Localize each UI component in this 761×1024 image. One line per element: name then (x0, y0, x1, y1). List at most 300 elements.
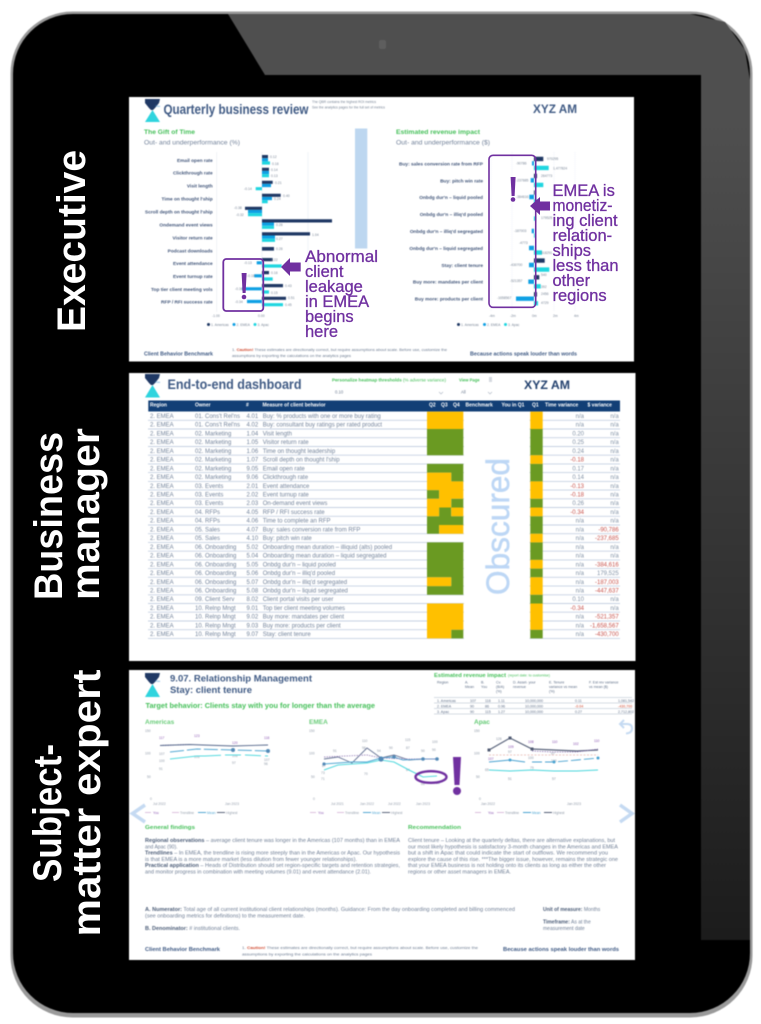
bar chart: out- and underperformance percent: -0.34 (235, 287, 243, 291)
bar chart: estimated revenue impact: Buy more: mandates per client (413, 280, 483, 286)
table: region, owner, number, measure: 4.10 (246, 536, 259, 542)
chart: Apac: 150 (474, 729, 480, 733)
table: time variance and dollar variance: -187,003 (595, 580, 619, 586)
chart: EMEA: 71 (321, 777, 325, 781)
callout: abnormal client leakage: Abnormal (305, 248, 378, 266)
table: time variance and dollar variance: n/a (610, 458, 619, 464)
table: estimated revenue impact: variance vs mean (549, 685, 577, 689)
table: time variance and dollar variance: n/a (576, 545, 585, 551)
chart: EMEA: You (318, 811, 324, 815)
table: estimated revenue impact: 10,000,000 (525, 710, 543, 714)
table: region, owner, number, measure: 2. EMEA (150, 510, 174, 516)
note: QBR contents: See the analytics pages for the full set of metrics (312, 106, 385, 110)
table: region, owner, number, measure: Buy: sales conversion rate from RFP (263, 527, 360, 533)
table header: Time variance (545, 402, 578, 408)
chart: Apac: 100 (474, 752, 480, 756)
chart: Apac: Jan 2022 (481, 802, 495, 806)
table: time variance and dollar variance: n/a (610, 423, 619, 429)
table: region, owner, number, measure: Buy: consultant buy ratings per rated product (263, 423, 382, 429)
table: estimated revenue impact: 107 (470, 699, 476, 703)
table: time variance and dollar variance: n/a (610, 449, 619, 455)
chart: Apac: 107 (488, 757, 494, 761)
table: region, owner, number, measure: Onbdg dur'n – liquid segregated (263, 588, 348, 594)
chart: Apac: 50 (476, 775, 480, 779)
metric definitions: B. Denominator: # institutional clients. (145, 926, 240, 932)
chart: Apac: 0 (479, 797, 481, 801)
bar chart: out- and underperformance percent: 0.16 (271, 271, 278, 275)
table: estimated revenue impact: Mean (465, 685, 474, 689)
table: region, owner, number, measure: Onbdg dur'n – illiq'd pooled (263, 571, 335, 577)
legend: percent chart: 2. EMEA (236, 323, 251, 327)
footer: caution note: assumptions by exporting the calculations on the analytics pages (242, 952, 372, 956)
icon: hourglass logo (145, 374, 160, 398)
table: estimated revenue impact: 10,000,000 (525, 699, 543, 703)
table: estimated revenue impact: You (481, 685, 487, 689)
table: region, owner, number, measure: Event attendance (263, 484, 310, 490)
table: estimated revenue impact: (%) (549, 690, 555, 694)
chart: Apac (474, 719, 600, 815)
chart: Apac: Trendline (505, 811, 519, 815)
table: estimated revenue impact: 116 (485, 699, 491, 703)
table: time variance and dollar variance: -0.13 (570, 484, 585, 490)
bar chart: out- and underperformance percent: Top tier client meeting vols (151, 287, 213, 293)
placeholder: pale blue column (355, 128, 367, 248)
bar chart: out- and underperformance percent: -0.32 (236, 213, 244, 217)
callout: abnormal client leakage: in EMEA (305, 293, 369, 311)
table: region, owner, number, measure: 5.04 (246, 554, 259, 560)
footer: tagline: Because actions speak louder than words (503, 947, 619, 953)
table: region, owner, number, measure: 2. EMEA (150, 519, 174, 525)
icon: previous arrow (132, 805, 145, 822)
table header: Owner (195, 402, 211, 408)
legend: revenue chart: 3. Apac (508, 323, 520, 327)
bar chart: out- and underperformance percent: 0.43 (285, 284, 292, 288)
table header: Benchmark (466, 402, 493, 408)
table: region, owner, number, measure: 03. Events (195, 492, 223, 498)
table: region, owner, number, measure: 9.01 (246, 606, 259, 612)
chart: Apac: 108 (528, 740, 534, 744)
table: estimated revenue impact: revenue (513, 685, 526, 689)
table: region, owner, number, measure: 5.02 (246, 545, 259, 551)
table: time variance and dollar variance: n/a (610, 414, 619, 420)
table: time variance and dollar variance: n/a (610, 501, 619, 507)
chart: Americas: 106 (232, 754, 238, 758)
chart: EMEA: EMEA (309, 719, 328, 726)
chart: Americas: 97 (232, 761, 236, 765)
chart: Apac: You (488, 811, 494, 815)
table: estimated revenue impact: (%) (496, 690, 502, 694)
table header: Measure of client behavior (262, 402, 326, 408)
table: time variance and dollar variance: n/a (610, 554, 619, 560)
table: region, owner, number, measure: 06. Onboarding (195, 562, 236, 568)
controls: heatmap thresholds and view page: Personalize heatmap thresholds (% adverse variance) (332, 378, 447, 382)
callout: abnormal client leakage: here (305, 323, 338, 341)
recommendation (408, 825, 619, 876)
bar chart: estimated revenue impact: Onbdg dur'n – liquid pooled (419, 195, 483, 201)
table: region, owner, number, measure: 06. Onboarding (195, 545, 236, 551)
table: region, owner, number, measure: 2. EMEA (150, 501, 174, 507)
chart: Apac: 100 (528, 756, 534, 760)
bar chart: out- and underperformance percent: -0.38 (234, 206, 242, 210)
brand: XYZ AM: XYZ AM (533, 102, 577, 116)
table: estimated revenue impact: 86 (485, 704, 489, 708)
recommendation: explore the cause of this rise. ***The bigger issue, however, remains the strategic one (408, 857, 618, 863)
table: region, owner, number, measure: 9.06 (246, 475, 259, 481)
recommendation: Client tenure – Looking at the quarterly deltas, there are alternative explanations, but (408, 838, 616, 844)
heading: the gift of time: The Gift of Time (144, 129, 195, 136)
chart: EMEA: 90 (421, 749, 425, 753)
table: time variance and dollar variance (570, 414, 619, 638)
note: QBR contents (312, 100, 385, 110)
bar chart: estimated revenue impact: 264773 (541, 174, 552, 178)
legend: percent chart: 3. Apac (258, 323, 269, 327)
chart: Apac: 109 (508, 745, 514, 749)
recommendation: regions or other asset managers in EMEA. (408, 870, 511, 876)
bar chart: estimated revenue impact: 518291 (541, 251, 552, 255)
table: region, owner, number, measure: 2. EMEA (150, 580, 174, 586)
bar chart: out- and underperformance percent: 1.04 (312, 233, 319, 237)
chart: Apac: 79 (530, 766, 534, 770)
chart: Americas: Highest (226, 811, 238, 815)
callout: EMEA monetizing less: other (552, 272, 591, 290)
table: time variance and dollar variance: -237,685 (595, 536, 619, 542)
chart: Americas: 100 (145, 752, 151, 756)
table: estimated revenue impact: 90 (470, 704, 474, 708)
table header: Q4 (453, 402, 460, 408)
table: time variance and dollar variance: -0.18 (570, 492, 585, 498)
chart: EMEA: 87 (406, 746, 410, 750)
chart: EMEA: 110 (362, 739, 368, 743)
table: time variance and dollar variance: -0.34 (570, 606, 585, 612)
footer: caution note: assumptions by exporting the calculations on the analytics pages (232, 354, 351, 358)
callout: abnormal client leakage: client (305, 263, 344, 281)
table: time variance and dollar variance: n/a (610, 510, 619, 516)
heading: relationship management: 9.07. Relationship Management (170, 674, 313, 684)
bar chart: out- and underperformance percent: 0.00 (258, 314, 265, 318)
general findings: and monitor progress in combination with meeting volumes (9.01) and event attendance (2.01). (145, 870, 371, 876)
chart: Americas: Mean (207, 811, 216, 815)
chart: EMEA: 115 (405, 738, 411, 742)
chart: Apac: Highest (553, 811, 565, 815)
recommendation: but a shift in Apac that could indicate the start of outflows. We recommend you (408, 851, 608, 857)
table: region, owner, number, measure: 5.05 (246, 562, 259, 568)
table: estimated revenue impact: Region (437, 680, 448, 684)
table: estimated revenue impact: 1. Americas (437, 699, 456, 703)
callout: EMEA monetizing less: monetiz- (552, 197, 612, 215)
chart: Americas: Americas (145, 719, 175, 726)
chart: Apac: Jan 2023 (567, 802, 581, 806)
table: region, owner, number, measure: 2. EMEA (150, 492, 174, 498)
bar chart: estimated revenue impact: 0m (532, 314, 537, 318)
side label: Subject-matter expert: matter expert (65, 670, 109, 936)
table row lines (148, 420, 620, 638)
table: time variance and dollar variance: n/a (576, 580, 585, 586)
bar chart: out- and underperformance percent: -0.13 (244, 261, 252, 265)
table: region, owner, number, measure: 2. EMEA (150, 466, 174, 472)
icon: return arrow (620, 720, 632, 734)
unit of measure and timeframe: Timeframe: As at the (543, 920, 591, 926)
chart: EMEA: 91 (333, 749, 337, 753)
footer: benchmark name: Client Behavior Benchmark (144, 352, 214, 358)
chart: EMEA: 90 (432, 748, 436, 752)
footer: tagline: Because actions speak louder than words (470, 352, 577, 358)
callout: EMEA monetizing less: relation- (552, 227, 612, 245)
table header (148, 400, 620, 412)
table: region, owner, number, measure: Onbdg dur'n – liquid pooled (263, 562, 336, 568)
bar chart: out- and underperformance percent: 0.24 (274, 197, 281, 201)
table: time variance and dollar variance: n/a (576, 562, 585, 568)
metric definitions: (see onboarding metrics for definitions) to the measurement date. (145, 914, 305, 920)
table: region, owner, number, measure: 03. Events (195, 501, 223, 507)
chart: Apac: 126 (496, 737, 502, 741)
table: region, owner, number, measure: Event turnup rate (263, 492, 309, 498)
table: region, owner, number, measure: Onbdg dur'n – illiq'd segregated (263, 580, 347, 586)
table: time variance and dollar variance: n/a (576, 588, 585, 594)
chart: EMEA: 94 (377, 749, 381, 753)
table: region, owner, number, measure: 4.05 (246, 510, 259, 516)
table: region, owner, number, measure: 06. Onboarding (195, 580, 236, 586)
table: region, owner, number, measure: 4.07 (246, 527, 259, 533)
bar chart: out- and underperformance percent: Event attendance (173, 261, 213, 267)
table: time variance and dollar variance: n/a (610, 466, 619, 472)
chart: Apac: 65 (485, 768, 489, 772)
chart: Apac: 102 (573, 742, 579, 746)
chart: Apac: Apac (474, 719, 490, 726)
table: region, owner, number, measure: 8.02 (246, 597, 259, 603)
controls: heatmap thresholds and view page: All (461, 390, 466, 394)
table: region, owner, number, measure: Visitor return rate (263, 440, 309, 446)
bar chart: estimated revenue impact: 2m (553, 314, 558, 318)
table: region, owner, number, measure: 5.06 (246, 571, 259, 577)
table: estimated revenue impact: Cv. (496, 680, 501, 684)
table: region, owner, number, measure: 2. EMEA (150, 588, 174, 594)
table: time variance and dollar variance: 0.20 (572, 431, 585, 437)
recommendation: Recommendation (408, 825, 462, 831)
bar chart: out- and underperformance percent: -1.00 (212, 314, 220, 318)
table: region, owner, number, measure: 06. Onboarding (195, 554, 236, 560)
table: region, owner, number, measure: Time to complete an RFP (263, 519, 331, 525)
bar chart: out- and underperformance percent: 0.26 (276, 247, 283, 251)
table: time variance and dollar variance: n/a (610, 597, 619, 603)
chart: EMEA: 50 (311, 775, 315, 779)
chart: EMEA: Trendline (345, 811, 359, 815)
table: region, owner, number, measure: 2. EMEA (150, 554, 174, 560)
table: region, owner, number, measure: Client portal visits per user (263, 597, 333, 603)
chart: EMEA: Jan 2023 (416, 802, 430, 806)
callout: EMEA monetizing less: ing client (552, 212, 618, 230)
table: estimated revenue impact: 1.27 (498, 710, 505, 714)
bar chart: out- and underperformance percent: Time on thought l'ship (162, 197, 213, 203)
table: time variance and dollar variance: -90,786 (598, 527, 619, 533)
general findings: is that EMEA is a more mature market (less dilution from fewer younger relationships). (145, 857, 357, 863)
bar chart: out- and underperformance percent: 0.40 (283, 194, 290, 198)
side label: Business manager: Business (27, 432, 71, 600)
table: estimated revenue impact: 10,000,000 (525, 704, 543, 708)
bar chart: estimated revenue impact: Onbdg dur'n – illiq'd segregated (410, 229, 483, 235)
bar chart: estimated revenue impact: 179525 (541, 216, 552, 220)
table: region, owner, number, measure: 2. EMEA (150, 536, 174, 542)
general findings: Practical application – Heads of Distribution should set region-specific targets and retention strategies, (145, 863, 400, 869)
general findings: and Apac (90). (145, 844, 178, 850)
heading: estimated revenue impact: Estimated revenue impact (396, 129, 481, 136)
chart: EMEA: 70 (364, 772, 368, 776)
table: region, owner, number, measure: 2. EMEA (150, 562, 174, 568)
metric definitions: A. Numerator: Total age of all current institutional client relationships (months). Guidance: From the day onboarding completed and billing commenced (145, 907, 515, 913)
side label: Executive: Executive (50, 150, 94, 332)
panel: end-to-end dashboard (129, 373, 636, 661)
table: region, owner, number, measure: 5.08 (246, 588, 259, 594)
table: region, owner, number, measure: Top tier client meeting volumes (263, 606, 345, 612)
subheading: dollar performance: Out- and underperformance ($) (396, 140, 490, 146)
note: QBR contents: The QBR contains the highest ROI metrics (312, 100, 376, 104)
controls: heatmap thresholds and view page: View Page (459, 378, 480, 382)
table: region, owner, number, measure: 2. EMEA (150, 615, 174, 621)
bar chart: out- and underperformance percent: Ondemand event views (159, 222, 213, 228)
chart: Americas: Jan 2023 (225, 802, 239, 806)
heading: relationship management: Stay: client tenure (170, 685, 252, 696)
controls: heatmap thresholds and view page: 0.10 (335, 390, 344, 394)
table: region, owner, number, measure: 01. Cons't Rel'ns (195, 414, 240, 420)
bar chart: out- and underperformance percent: Visitor return rate (173, 235, 213, 241)
footer: caution note (232, 348, 447, 358)
bar chart: estimated revenue impact: -187003 (514, 229, 527, 233)
bar chart: estimated revenue impact: -237685 (516, 178, 529, 182)
table: time variance and dollar variance: n/a (610, 519, 619, 525)
table: region, owner, number, measure: 10. Relnp Mngt (195, 615, 236, 621)
chart: Americas: 96 (264, 762, 268, 766)
controls: heatmap thresholds and view page (332, 377, 492, 394)
bar chart: estimated revenue impact: Stay: client tenure (441, 263, 483, 269)
table: estimated revenue impact: 2,712,802 (618, 710, 634, 714)
table: region, owner, number, measure: 2. EMEA (150, 545, 174, 551)
chart: Americas: 91 (159, 767, 163, 771)
table header: Region (150, 402, 167, 408)
chart: Americas: 107 (159, 752, 165, 756)
chart: Apac: 57 (552, 777, 556, 781)
chart: EMEA: 66 (421, 782, 425, 786)
bar chart: out- and underperformance percent: Clickthrough rate (173, 171, 213, 177)
recommendation: that your EMEA business is not holding onto its clients as long as either the other (408, 863, 606, 869)
bar chart: out- and underperformance percent: RFP / RFI success rate (161, 300, 213, 306)
bar chart: out- and underperformance percent: Event turnup rate (173, 274, 213, 280)
table: estimated revenue impact: -430,700 (618, 704, 632, 708)
table: region, owner, number, measure: 1.06 (246, 449, 259, 455)
table: region, owner, number, measure: Time on thought leadership (263, 449, 336, 455)
table: estimated revenue impact: 3. Apac (437, 710, 449, 714)
bar chart: out- and underperformance percent: 0.16 (272, 162, 279, 166)
target behavior: Target behavior: Clients stay with you for longer than the average (146, 703, 375, 710)
table: region, owner, number, measure: 9.07 (246, 632, 259, 638)
legend: percent chart (207, 323, 269, 327)
table header: # (246, 402, 249, 408)
table: region, owner, number, measure: 2. EMEA (150, 484, 174, 490)
table: region, owner, number, measure: RFP / RFI success rate (263, 510, 325, 516)
callout: abnormal client leakage (223, 248, 378, 341)
table header: Q1 (532, 402, 539, 408)
table: estimated revenue impact: Estimated revenue impact (434, 673, 506, 679)
icon: hourglass logo: You (155, 104, 160, 108)
general findings: Trendlines – In EMEA, the trendline is rising more steeply than in the Americas or Apac. Our hypothesis (145, 851, 401, 857)
panel: quarterly business review (129, 97, 634, 362)
chart: Apac: 110 (594, 739, 600, 743)
table: region, owner, number, measure: 9.02 (246, 615, 259, 621)
table: estimated revenue impact (434, 673, 634, 714)
bar chart: out- and underperformance percent: Visit length (187, 184, 213, 190)
table: time variance and dollar variance: 0.17 (572, 466, 585, 472)
table: region, owner, number, measure: 05. Sales (195, 527, 220, 533)
table: time variance and dollar variance: -384,616 (595, 562, 619, 568)
bar chart: out- and underperformance percent (145, 152, 332, 318)
bar chart: estimated revenue impact: -4773 (519, 241, 528, 245)
table: time variance and dollar variance: n/a (576, 519, 585, 525)
table: region, owner, number, measure: 09. Client Serv (195, 597, 234, 603)
chart: EMEA: Jul 2022 (388, 802, 401, 806)
chart: Apac: 51 (508, 777, 512, 781)
bar chart: out- and underperformance percent: 0.13 (271, 174, 278, 178)
table: region, owner, number, measure: 2.03 (246, 501, 259, 507)
table: time variance and dollar variance: n/a (576, 414, 585, 420)
table: region, owner, number, measure: 2. EMEA (150, 623, 174, 629)
table: region, owner, number, measure: 1.05 (246, 440, 259, 446)
table: region, owner, number, measure: 06. Onboarding (195, 571, 236, 577)
table: region, owner, number, measure: 10. Relnp Mngt (195, 632, 236, 638)
callout: EMEA monetizing less: EMEA is (552, 182, 615, 200)
chart: EMEA: Mean (372, 811, 381, 815)
table: region, owner, number, measure: 02. Marketing (195, 431, 231, 437)
footer: benchmark name: Client Behavior Benchmark (145, 947, 221, 953)
callout: EMEA monetizing less: less than (552, 257, 619, 275)
bar chart: estimated revenue impact: 4m (574, 314, 579, 318)
mask: obscured benchmark columns (464, 412, 530, 642)
chart: EMEA: 65 (436, 781, 440, 785)
bar chart: out- and underperformance percent: 0.27 (276, 237, 283, 241)
chart: Apac: Mean (532, 811, 541, 815)
table: region, owner, number, measure: Clickthrough rate (263, 475, 309, 481)
table: region, owner, number, measure: Visit length (263, 431, 292, 437)
table: time variance and dollar variance: n/a (610, 484, 619, 490)
footer: caution note: 1. Caution! These estimates are directionally correct, but require assumptions about scale. Before use, customize the (242, 946, 478, 950)
table: region, owner, number, measure: 5.07 (246, 580, 259, 586)
table: time variance and dollar variance: n/a (576, 536, 585, 542)
table: estimated revenue impact: (report date: to customise) (508, 674, 550, 678)
table: estimated revenue impact: 0.11 (575, 699, 582, 703)
bar chart: out- and underperformance percent: 0.22 (271, 258, 278, 262)
callout: EMEA monetizing less (489, 155, 619, 307)
table: time variance and dollar variance: n/a (576, 632, 585, 638)
callout: abnormal client leakage: leakage (305, 278, 363, 296)
bar chart: out- and underperformance percent: -0.18 (247, 274, 255, 278)
brand: XYZ AM: XYZ AM (524, 378, 570, 392)
chart: EMEA: 150 (309, 729, 315, 733)
chart: Americas: 117 (159, 736, 165, 740)
table: estimated revenue impact: 115 (485, 710, 491, 714)
bar chart: out- and underperformance percent: -0.34 (235, 300, 243, 304)
table: region, owner, number, measure: 2.01 (246, 484, 259, 490)
chart: Apac: 97 (508, 750, 512, 754)
bar chart: estimated revenue impact: -384616 (516, 195, 529, 199)
table: estimated revenue impact: F. Est rev variance (589, 680, 619, 684)
bar chart: out- and underperformance percent: Scroll depth on thought l'ship (145, 210, 213, 216)
icon: hourglass logo: You (155, 380, 160, 384)
callout: EMEA tenure drop (416, 757, 461, 795)
table: region, owner, number, measure: Scroll depth on thought l'ship (263, 458, 340, 464)
table: region, owner, number, measure: 9.03 (246, 623, 259, 629)
table: estimated revenue impact: -0.04 (575, 704, 583, 708)
chart: Americas: 100 (159, 759, 165, 763)
table: region, owner, number, measure: 05. Sales (195, 536, 220, 542)
table: region, owner, number, measure: 2. EMEA (150, 597, 174, 603)
chart: Americas: 118 (264, 736, 270, 740)
